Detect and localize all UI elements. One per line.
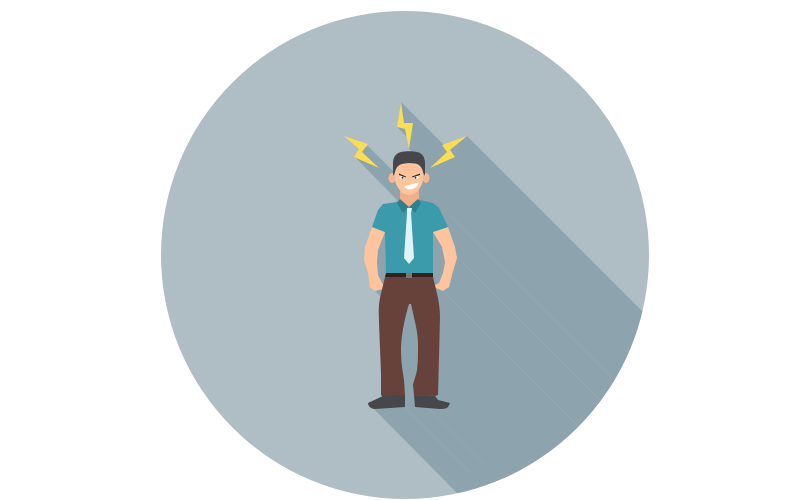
tie: [404, 208, 414, 264]
trousers: [379, 277, 440, 397]
hair: [393, 151, 425, 176]
circle background: [161, 11, 649, 499]
grin: [404, 182, 419, 190]
neck: [400, 188, 419, 208]
left ear: [388, 173, 396, 183]
right arm: [433, 227, 457, 291]
belt: [385, 273, 433, 277]
right ear: [422, 173, 430, 183]
illustration: angry man on circular badge: [161, 11, 649, 499]
icon: right lightning bolt: [430, 136, 467, 168]
icon: top lightning bolt: [397, 102, 413, 149]
left eye: [399, 176, 405, 179]
face: [395, 160, 423, 195]
angry eyebrows and pupils: [399, 174, 420, 178]
man figure: [364, 151, 457, 409]
collar: [397, 199, 421, 213]
right eye: [413, 176, 419, 179]
left shoe: [368, 395, 405, 409]
shirt: [372, 200, 448, 273]
long diagonal shadow: [355, 102, 650, 500]
belt buckle: [406, 273, 412, 278]
right shoe: [414, 395, 450, 409]
left arm: [364, 227, 385, 291]
icon: left lightning bolt: [344, 136, 379, 168]
forehead wrinkles: [402, 167, 416, 170]
